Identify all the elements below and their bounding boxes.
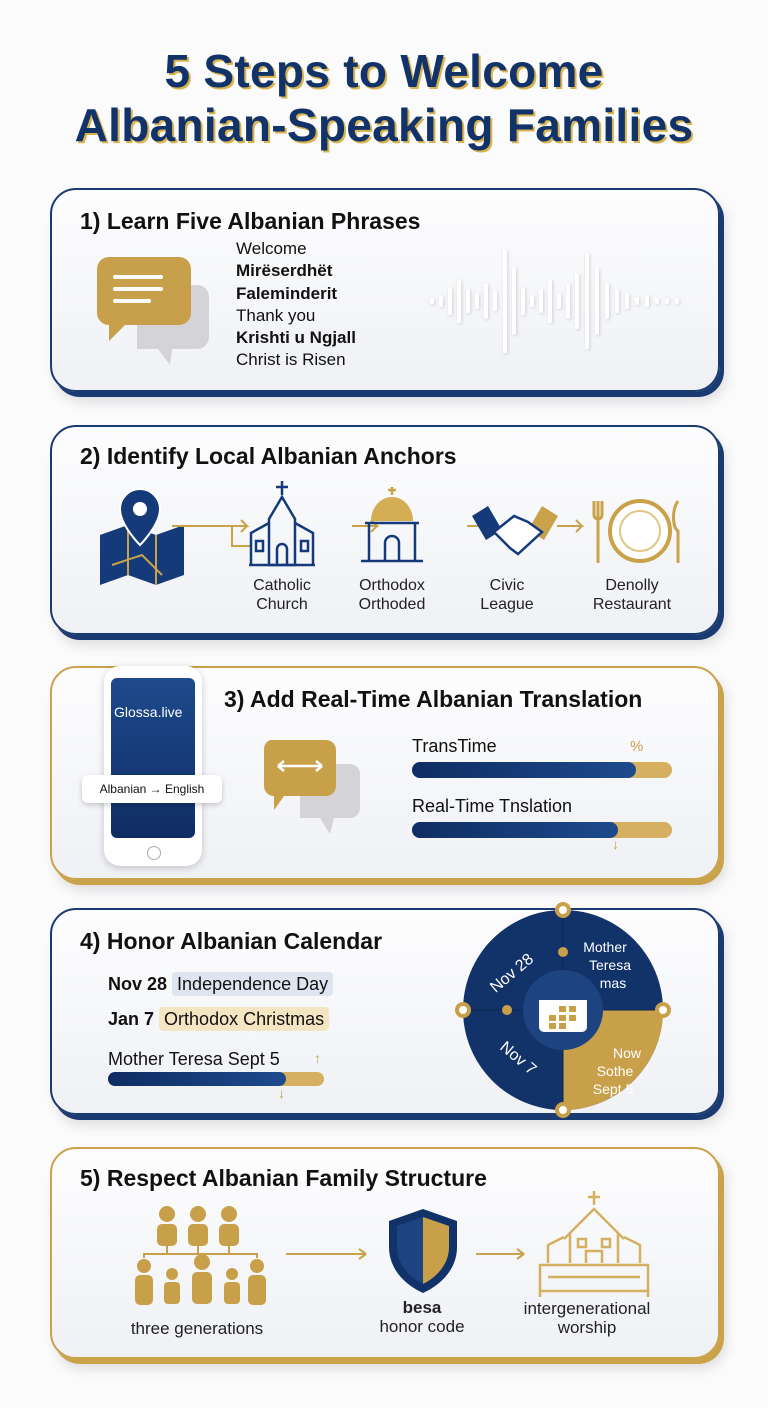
panel: step 3: Real-Time Tnslation — [412, 796, 572, 816]
panel: step 1 — [50, 188, 720, 392]
panel: step 5: intergenerational — [524, 1299, 650, 1318]
calendar wheel: Sothe — [597, 1063, 634, 1079]
phrase list: Krishti u Ngjall — [236, 328, 356, 347]
panel: step 4: ↓ — [278, 1085, 285, 1101]
icon: orthodox — [361, 487, 423, 562]
phone — [104, 666, 202, 866]
title: Albanian-Speaking Families — [75, 99, 693, 151]
heading 5: 5) Respect Albanian Family Structure — [80, 1165, 487, 1191]
calendar wheel: mas — [600, 975, 626, 991]
calendar wheel — [455, 902, 671, 1118]
panel: step 4: Jan 7 Orthodox Christmas — [108, 1009, 324, 1029]
calendar wheel: Mother — [583, 939, 627, 955]
heading 1: 1) Learn Five Albanian Phrases — [80, 208, 420, 234]
panel: step 3: % — [630, 738, 643, 755]
icon: handshake — [472, 506, 558, 556]
labels — [253, 577, 311, 613]
panel: step 4: ↑ — [314, 1050, 321, 1066]
panel: step 5: worship — [558, 1318, 616, 1337]
phrase list: Welcome — [236, 239, 307, 258]
icon: sound wave — [430, 250, 681, 354]
calendar wheel: Nov 7 — [496, 1039, 539, 1079]
calendar wheel: Now — [613, 1045, 642, 1061]
phone: Glossa.live — [114, 704, 182, 720]
labels: Catholic — [253, 577, 311, 594]
panel: step 5: three generations — [131, 1319, 263, 1338]
panel: step 2: League — [480, 596, 534, 613]
panel: step 2: Orthoded — [359, 596, 425, 613]
phrase list: Christ is Risen — [236, 350, 346, 369]
heading 3: 3) Add Real-Time Albanian Translation — [224, 686, 642, 712]
date list: Nov 28 Independence Day — [108, 974, 328, 994]
panel: step 3 — [50, 666, 720, 880]
labels: Church — [256, 596, 308, 613]
icon: plate — [592, 499, 680, 563]
panel: step 3: ↓ — [612, 836, 619, 852]
icon: family tree — [135, 1206, 266, 1305]
panel: step 2: Orthodox — [359, 577, 425, 594]
icon: church — [249, 481, 315, 566]
phrase list — [236, 239, 356, 369]
language pill: Albanian → English — [100, 782, 204, 796]
icon: chat bubbles — [97, 257, 209, 365]
heading 2: 2) Identify Local Albanian Anchors — [80, 443, 457, 469]
heading 4: 4) Honor Albanian Calendar — [80, 928, 382, 954]
panel: step 2: Restaurant — [593, 596, 671, 613]
panel: step 5: besa — [403, 1298, 441, 1317]
icon: translate bubbles — [264, 740, 360, 834]
panel: step 2: Denolly — [605, 577, 659, 594]
icon: map pin — [100, 490, 184, 585]
panel: step 2 — [50, 425, 720, 635]
icon: church with pews — [538, 1191, 650, 1297]
arrow — [476, 1248, 524, 1260]
arrows — [172, 519, 584, 547]
progress bars: TransTime — [412, 736, 497, 756]
panel: step 2: Civic — [490, 577, 524, 594]
phrase list: Thank you — [236, 306, 315, 325]
phrase list: Mirëserdhët — [236, 261, 332, 280]
panel: step 4 — [50, 908, 720, 1115]
calendar wheel: Nov 28 — [487, 951, 537, 996]
calendar wheel: Sept 5 — [593, 1081, 633, 1097]
icon: shield — [389, 1209, 457, 1293]
language pill — [82, 775, 222, 803]
title — [75, 45, 694, 152]
arrow — [286, 1248, 366, 1260]
calendar wheel: Teresa — [589, 957, 631, 973]
panel: step 5 — [50, 1147, 720, 1359]
panel: step 4: Mother Teresa Sept 5 — [108, 1049, 280, 1069]
title: 5 Steps to Welcome — [164, 45, 604, 97]
panel: step 5: honor code — [379, 1317, 465, 1336]
phrase list: Faleminderit — [236, 284, 337, 303]
